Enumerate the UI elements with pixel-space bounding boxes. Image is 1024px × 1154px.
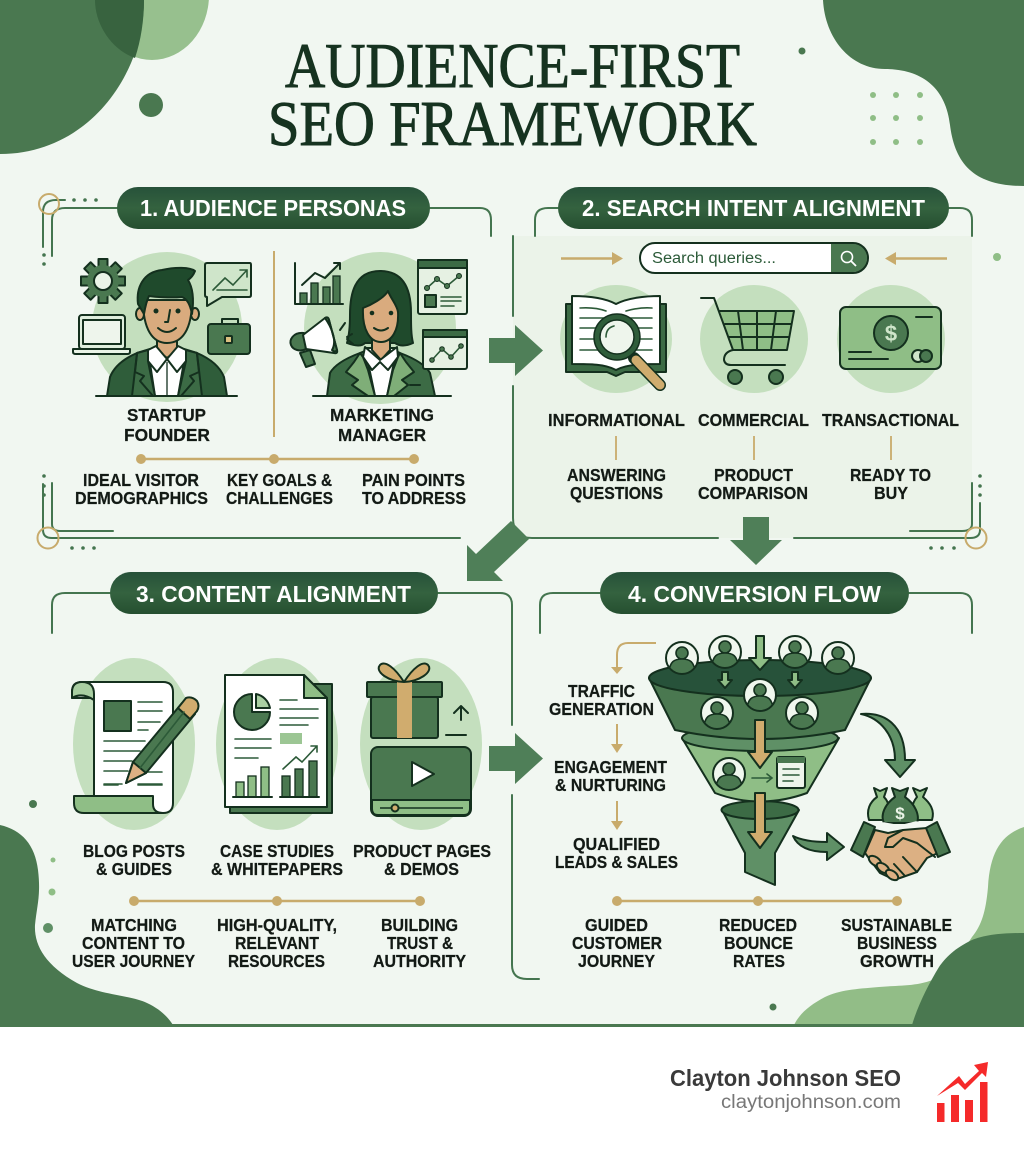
content labels: BLOG POSTS <box>83 841 185 861</box>
conversion benefits: SUSTAINABLE <box>841 915 952 935</box>
persona attributes: TO ADDRESS <box>362 488 466 508</box>
search bar <box>640 243 868 273</box>
persona labels: MARKETING <box>330 405 434 425</box>
heading: search intent: 2. SEARCH INTENT ALIGNMENT <box>582 195 926 221</box>
arrow: panel 2 to 4 <box>730 517 782 565</box>
content labels <box>83 841 491 879</box>
content labels: & DEMOS <box>384 859 459 879</box>
persona attributes: PAIN POINTS <box>362 470 465 490</box>
conversion benefits: RATES <box>733 951 785 971</box>
persona labels <box>124 405 434 445</box>
intent descriptions: ANSWERING <box>567 465 666 485</box>
content benefits: RESOURCES <box>228 951 325 971</box>
heading: audience personas <box>117 187 430 229</box>
conversion benefits <box>572 915 952 971</box>
arrow: funnel to handshake <box>793 833 844 860</box>
brand url: claytonjohnson.com <box>721 1092 901 1113</box>
arrows into search bar <box>561 252 947 265</box>
icon: transactional card: $ <box>885 321 897 346</box>
funnel stage labels: ENGAGEMENT <box>554 757 667 777</box>
intent descriptions: PRODUCT <box>714 465 793 485</box>
funnel stage labels: LEADS & SALES <box>555 852 678 872</box>
content labels: & WHITEPAPERS <box>211 859 343 879</box>
content labels: PRODUCT PAGES <box>353 841 491 861</box>
funnel stage labels <box>549 681 678 872</box>
divider <box>273 251 275 437</box>
panel: search intent alignment <box>513 187 986 550</box>
icon: money bags and handshake <box>851 788 950 882</box>
icon: blog post <box>72 658 198 830</box>
timeline <box>612 896 902 906</box>
funnel stage labels: & NURTURING <box>555 775 666 795</box>
search bar: Search queries... <box>652 250 776 267</box>
arrow: panel 1 to 2 <box>489 325 543 376</box>
heading: audience personas: 1. AUDIENCE PERSONAS <box>140 195 406 221</box>
conversion benefits: JOURNEY <box>578 951 655 971</box>
panel: audience personas <box>38 187 491 550</box>
persona attributes: CHALLENGES <box>226 488 333 508</box>
intent descriptions: COMPARISON <box>698 483 808 503</box>
conversion benefits: REDUCED <box>719 915 797 935</box>
icon: startup founder <box>73 252 251 402</box>
persona attributes: DEMOGRAPHICS <box>75 488 208 508</box>
heading: conversion flow <box>600 572 909 614</box>
intent descriptions: BUY <box>874 483 908 503</box>
connector ticks <box>616 436 891 460</box>
persona attributes: KEY GOALS & <box>227 470 332 490</box>
icon: case study <box>216 658 338 830</box>
persona attributes: IDEAL VISITOR <box>83 470 199 490</box>
persona attributes <box>75 470 466 508</box>
intent labels: COMMERCIAL <box>698 410 809 430</box>
conversion benefits: BUSINESS <box>857 933 937 953</box>
conversion benefits: GROWTH <box>860 951 934 971</box>
conversion benefits: GUIDED <box>585 915 648 935</box>
icon: commercial cart <box>700 285 808 393</box>
content benefits: MATCHING <box>91 915 177 935</box>
content benefits: RELEVANT <box>235 933 319 953</box>
content benefits: CONTENT TO <box>82 933 185 953</box>
intent labels: INFORMATIONAL <box>548 410 685 430</box>
icon: informational book <box>560 285 672 393</box>
arrow: panel 2 to 3 <box>467 521 529 581</box>
intent descriptions: READY TO <box>850 465 931 485</box>
funnel <box>649 636 871 885</box>
content labels: & GUIDES <box>96 859 172 879</box>
content labels: CASE STUDIES <box>220 841 334 861</box>
content benefits: HIGH-QUALITY, <box>217 915 337 935</box>
timeline <box>136 454 419 464</box>
funnel stage labels: QUALIFIED <box>573 834 660 854</box>
intent labels <box>548 410 959 430</box>
arrow: funnel to growth (curved) <box>861 714 915 777</box>
panel: conversion flow <box>540 572 972 971</box>
heading: conversion flow: 4. CONVERSION FLOW <box>628 581 882 607</box>
panel: content alignment <box>52 572 539 979</box>
icon: money bags and handshake: $ <box>895 804 905 823</box>
intent labels: TRANSACTIONAL <box>822 410 959 430</box>
intent descriptions <box>567 465 931 503</box>
icon: transactional card <box>837 285 945 393</box>
funnel stage labels: TRAFFIC <box>568 681 635 701</box>
content benefits: AUTHORITY <box>373 951 466 971</box>
intent descriptions: QUESTIONS <box>570 483 663 503</box>
conversion benefits: CUSTOMER <box>572 933 662 953</box>
heading: search intent <box>558 187 949 229</box>
content benefits: USER JOURNEY <box>72 951 195 971</box>
title: AUDIENCE-FIRST <box>285 30 740 101</box>
footer <box>0 1027 1024 1154</box>
funnel stage labels: GENERATION <box>549 699 654 719</box>
persona labels: STARTUP <box>127 405 206 425</box>
heading: content alignment: 3. CONTENT ALIGNMENT <box>136 581 412 607</box>
persona labels: FOUNDER <box>124 425 210 445</box>
timeline <box>129 896 425 906</box>
brand name: Clayton Johnson SEO <box>670 1065 901 1091</box>
gold step arrows <box>611 643 656 830</box>
icon: red growth chart <box>937 1062 988 1122</box>
conversion benefits: BOUNCE <box>724 933 793 953</box>
content benefits: TRUST & <box>387 933 453 953</box>
icon: product pages and demos <box>360 658 482 830</box>
arrow: panel 3 to 4 <box>489 733 543 784</box>
title: SEO FRAMEWORK <box>268 88 757 159</box>
heading: content alignment <box>110 572 438 614</box>
content benefits: BUILDING <box>381 915 458 935</box>
title <box>268 30 757 159</box>
content benefits <box>72 915 466 971</box>
persona labels: MANAGER <box>338 425 426 445</box>
icon: marketing manager <box>291 252 467 404</box>
